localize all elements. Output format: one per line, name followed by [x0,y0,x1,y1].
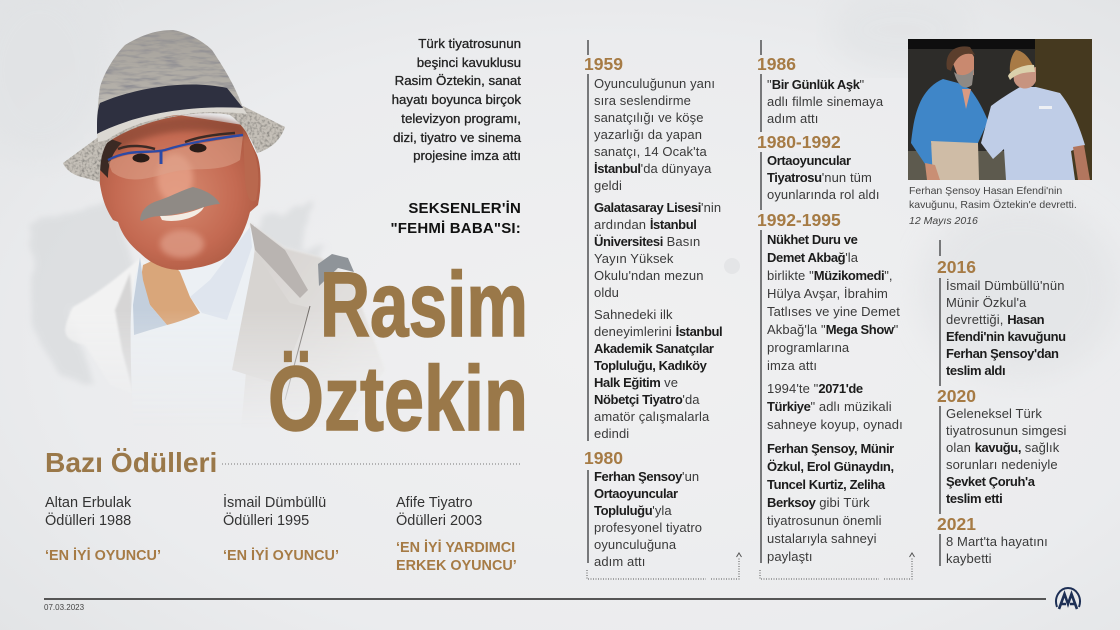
text 1959: Okulu'ndan mezun [594,268,704,283]
timeline column 2 [757,40,915,580]
photo caption [909,185,1077,227]
text 1992-1995: Türkiye" adlı müzikali [767,399,892,414]
text 2020: teslim etti [946,491,1002,506]
text 1992-1995: ustalarıyla sahneyi [767,531,877,546]
date: 07.03.2023 [44,603,84,612]
year 2021: 2021 [937,514,976,534]
intro text: dizi, tiyatro ve sinema [393,130,521,145]
text 1980: Topluluğu'yla [594,503,672,518]
face [98,112,261,270]
text 1980: adım attı [594,554,645,569]
text 1992-1995: sahneye koyup, oynadı [767,417,903,432]
text 1959: Üniversitesi Basın [594,234,700,249]
eyes and glasses [108,133,243,180]
text 1992-1995: Berksoy gibi Türk [767,495,870,510]
text 2016: Efendi'nin kavuğunu [946,329,1066,344]
text 2021: kaybetti [946,551,992,566]
continuation arrow [760,552,915,580]
award: İsmail Dümbüllü: Ödülleri 1995 [223,513,309,529]
text 1959: Yayın Yüksek [594,251,674,266]
intro text: projesine imza attı [413,148,521,163]
text 2020: sorunları nedeniyle [946,457,1058,472]
intro text [392,36,522,163]
timeline column 1 [584,40,742,580]
man in white shirt with turban [981,50,1090,180]
moustache and smile [140,187,220,221]
text 1959: yazarlığı da yapan [594,127,702,142]
text 2021 [946,534,1048,566]
text 1980: Ferhan Şensoy'un [594,469,699,484]
award: Afife Tiyatro: ‘EN İYİ YARDIMCI [396,540,515,556]
text 2020: Şevket Çoruh'a [946,474,1035,489]
text 2016: Münir Özkul'a [946,295,1026,310]
text 1992-1995: Hülya Avşar, İbrahim [767,286,888,301]
award: İsmail Dümbüllü: ‘EN İYİ OYUNCU’ [223,548,339,564]
text 1959: İstanbul'da dünyaya [594,161,711,176]
award: İsmail Dümbüllü [223,494,339,564]
watercolor wash behind portrait [30,195,325,385]
footer line [44,598,1046,600]
text 1992-1995: 1994'te "2071'de [767,381,863,396]
text 1992-1995: Tuncel Kurtiz, Zeliha [767,477,885,492]
intro text: Türk tiyatrosunun [418,36,521,51]
text 1959: deneyimlerini İstanbul [594,324,722,339]
year 1980: 1980 [584,448,623,468]
text 1980: Ortaoyuncular [594,486,678,501]
text 1959: sıra seslendirme [594,93,691,108]
photo caption: 12 Mayıs 2016 [909,215,978,227]
text 1992-1995: Demet Akbağ'la [767,250,858,265]
text 1986: adlı filmle sinemaya [767,94,883,109]
text 1992-1995 [767,232,903,564]
text 2016: Ferhan Şensoy'dan [946,346,1059,361]
text 1986 [767,77,884,126]
jacket and shirt [65,223,376,400]
text 1980 [594,469,702,569]
icon: AA logo [1054,587,1082,610]
subtitle: SEKSENLER'İN [408,200,521,217]
year 2016: 2016 [937,257,976,277]
text 1992-1995: imza attı [767,358,817,373]
text 1992-1995: tiyatrosunun önemli [767,513,882,528]
text 1959: Sahnedeki ilk [594,307,673,322]
photo caption: kavuğunu, Rasim Öztekin'e devretti. [909,199,1077,211]
text 2021: 8 Mart'ta hayatını [946,534,1048,549]
awards heading: Bazı Ödülleri [45,446,217,478]
text 2020: Geleneksel Türk [946,406,1042,421]
award: Afife Tiyatro: ERKEK OYUNCU’ [396,558,517,574]
award: Afife Tiyatro: Afife Tiyatro [396,495,473,511]
year 1980-1992: 1980-1992 [757,132,841,152]
text 1992-1995: paylaştı [767,549,813,564]
award: Altan Erbulak: Altan Erbulak [45,495,131,511]
man in blue shirt [911,46,988,180]
text 1959: ardından İstanbul [594,217,696,232]
text 2016: devrettiği, Hasan [946,312,1044,327]
continuation arrow [586,552,742,580]
text 1959: sanatçı, 14 Ocak'ta [594,144,707,159]
text 1959: Galatasaray Lisesi'nin [594,200,721,215]
year 2020: 2020 [937,386,976,406]
award: Afife Tiyatro: Ödülleri 2003 [396,513,482,529]
text 1959 [594,76,722,441]
text 2020 [946,406,1066,506]
text 1980-1992: oyunlarında rol aldı [767,187,880,202]
intro text: hayatı boyunca birçok [392,92,521,107]
year 1986: 1986 [757,54,796,74]
text 1959: Topluluğu, Kadıköy [594,358,706,373]
stage photo [908,39,1092,180]
award: Altan Erbulak: ‘EN İYİ OYUNCU’ [45,548,161,564]
text 2016 [946,278,1066,378]
text 1986: "Bir Günlük Aşk" [767,77,864,92]
photo caption: Ferhan Şensoy Hasan Efendi'nin [909,185,1062,197]
text 1959: Oyunculuğunun yanı [594,76,715,91]
text 1959: Nöbetçi Tiyatro'da [594,392,700,407]
text 1992-1995: birlikte "Müzikomedi", [767,268,893,283]
portrait of Rasim Öztekin [31,30,376,400]
text 1992-1995: Nükhet Duru ve [767,232,857,247]
intro text: beşinci kavuklusu [417,55,521,70]
award: Afife Tiyatro [396,495,517,574]
text 1980-1992 [767,153,880,202]
text 2020: tiyatrosunun simgesi [946,423,1066,438]
award: İsmail Dümbüllü: İsmail Dümbüllü [223,495,326,511]
text 1992-1995: Özkul, Erol Günaydın, [767,459,894,474]
subtitle: "FEHMİ BABA"SI: [390,220,521,237]
text 1959: sanatçılığı ve köşe [594,110,704,125]
timeline column 3 [937,240,1066,566]
text 1959: geldi [594,178,622,193]
text 1959: oldu [594,285,619,300]
text 1980-1992: Ortaoyuncular [767,153,851,168]
text 2016: teslim aldı [946,363,1005,378]
award: Altan Erbulak [45,495,161,564]
text 2016: İsmail Dümbüllü'nün [946,278,1065,293]
text 1980: oyunculuğuna [594,537,676,552]
hat [63,30,285,182]
text 1992-1995: Ferhan Şensoy, Münir [767,441,894,456]
text 1992-1995: programlarına [767,340,849,355]
text 1980: profesyonel tiyatro [594,520,702,535]
text 2020: olan kavuğu, sağlık [946,440,1059,455]
intro text: Rasim Öztekin, sanat [395,73,521,88]
award: Altan Erbulak: Ödülleri 1988 [45,513,131,529]
text 1959: amatör çalışmalarla [594,409,709,424]
text 1980-1992: Tiyatrosu'nun tüm [767,170,872,185]
title: Rasim Öztekin [268,255,528,440]
text 1986: adım attı [767,111,818,126]
subtitle [390,200,521,237]
pocket square [318,254,354,286]
text 1959: edindi [594,426,629,441]
text 1959: Halk Eğitim ve [594,375,678,390]
text 1992-1995: Tatlıses ve yine Demet [767,304,900,319]
year 1959: 1959 [584,54,623,74]
text 1992-1995: Akbağ'la "Mega Show" [767,322,898,337]
intro text: televizyon programı, [401,111,521,126]
text 1959: Akademik Sanatçılar [594,341,714,356]
year 1992-1995: 1992-1995 [757,210,841,230]
